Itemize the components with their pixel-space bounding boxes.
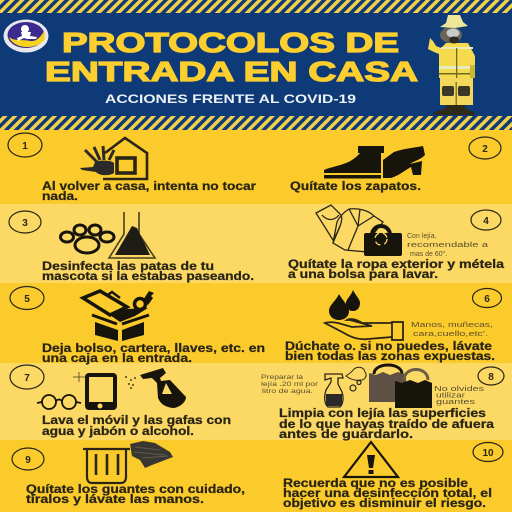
text: a una bolsa para lavar. — [288, 269, 438, 281]
text: Al volver a casa, intenta no tocar — [42, 181, 257, 193]
text — [26, 484, 245, 506]
number 5 — [10, 286, 44, 310]
number 7 — [10, 365, 44, 389]
panel: step 3 — [9, 211, 254, 283]
number 5: 5 — [24, 294, 30, 305]
text — [42, 415, 231, 438]
number 2: 2 — [482, 144, 488, 155]
icon: box with belongings — [83, 291, 154, 341]
title — [45, 27, 418, 87]
note — [407, 233, 488, 258]
text: nada. — [42, 191, 78, 203]
text: Quítate los zapatos. — [290, 181, 421, 193]
text: Lava el móvil y las gafas con — [42, 415, 231, 427]
number 3: 3 — [22, 218, 28, 229]
note: cara,cuello,etc'. — [413, 331, 488, 338]
note: recomendable a — [407, 242, 488, 249]
text: mascota si la estabas paseando. — [42, 271, 254, 283]
number 8: 8 — [488, 372, 494, 383]
icon: flask — [109, 212, 155, 258]
icon: clothes — [316, 205, 383, 252]
note: gloves: guantes — [436, 399, 476, 406]
number 10: 10 — [482, 448, 494, 459]
icon: bleach spray — [325, 367, 366, 407]
note — [411, 322, 493, 338]
text — [42, 343, 265, 365]
note: gloves — [434, 386, 485, 406]
number 9 — [12, 448, 44, 470]
text — [288, 259, 505, 281]
panel: step 5 — [10, 286, 265, 365]
text: antes de guardarlo. — [279, 429, 413, 441]
note: preparation: Preparar la — [261, 374, 304, 381]
panel: step 1 — [8, 133, 257, 203]
icon: trash bin — [83, 449, 130, 483]
text: Limpia con lejía las superficies — [279, 408, 486, 420]
panel: step 6 — [285, 288, 502, 363]
icon: shopping bags — [369, 365, 432, 408]
number 1: 1 — [22, 141, 28, 152]
icon: hand on house — [80, 138, 147, 179]
number 9: 9 — [25, 455, 31, 466]
text: Recuerda que no es posible — [283, 478, 468, 490]
text — [283, 478, 492, 510]
number 6 — [472, 288, 502, 308]
text — [42, 261, 254, 283]
icon: hand — [325, 319, 403, 340]
text: Dúchate o. si no puedes, lávate — [285, 341, 492, 353]
note: preparation: litro de agua. — [262, 388, 313, 395]
note: preparation: lejía .20 ml por — [261, 381, 319, 388]
text: agua y jabón o alcohol. — [42, 426, 194, 438]
number 8 — [478, 367, 504, 385]
icon: phone — [73, 372, 117, 410]
text — [279, 408, 495, 441]
number 7: 7 — [24, 373, 30, 384]
text: una caja en la entrada. — [42, 353, 192, 365]
number 4 — [471, 210, 501, 230]
text: bien todas las zonas expuestas. — [285, 351, 495, 363]
text — [285, 341, 495, 363]
text — [42, 181, 257, 203]
icon: drops — [329, 290, 360, 320]
note: gloves: No olvides — [434, 386, 485, 393]
icon: gloves — [130, 441, 173, 468]
number 2 — [469, 137, 501, 159]
icon: glasses — [37, 395, 81, 409]
note: Con lejía, — [407, 233, 437, 240]
title: ENTRADA EN CASA — [45, 56, 418, 87]
panel: header — [0, 0, 512, 130]
subtitle: ACCIONES FRENTE AL COVID-19 — [105, 92, 356, 106]
panel: step 8 — [261, 365, 504, 441]
number 6: 6 — [484, 294, 490, 305]
panel: step 9 — [12, 441, 245, 506]
text: Desinfecta las patas de tu — [42, 261, 214, 273]
icon: spray bottle — [125, 368, 186, 408]
number 4: 4 — [483, 216, 489, 227]
icon: warning triangle — [344, 442, 398, 477]
panel: step 2 — [290, 137, 501, 193]
text: Quítate la ropa exterior y métela — [288, 259, 505, 271]
icon: boot and heel — [324, 146, 425, 178]
number 1 — [8, 133, 42, 157]
text: hacer una desinfección total, el — [283, 488, 492, 500]
panel: step 7 — [10, 365, 231, 438]
number 10 — [473, 442, 503, 462]
title: PROTOCOLOS DE — [62, 27, 399, 58]
note: gloves: utilizar — [436, 392, 466, 400]
panel: step 4 — [288, 205, 505, 281]
panel: step 10 — [283, 442, 503, 510]
icon: firefighter — [428, 15, 475, 115]
icon: bag — [364, 226, 402, 256]
number 3 — [9, 211, 41, 233]
text: de lo que hayas traído de afuera — [279, 419, 495, 431]
note: mas de 60°. — [410, 250, 447, 258]
text: Deja bolso, cartera, llaves, etc. en — [42, 343, 265, 355]
text: Quítate los guantes con cuidado, — [26, 484, 245, 496]
text: objetivo es disminuir el riesgo. — [283, 498, 486, 510]
note: Manos, muñecas, — [411, 322, 493, 329]
icon: logo — [4, 20, 48, 52]
panel: background bands — [0, 130, 512, 512]
icon: paw — [60, 225, 114, 253]
text: tíralos y lávate las manos. — [26, 494, 204, 506]
note: preparation — [261, 374, 319, 395]
